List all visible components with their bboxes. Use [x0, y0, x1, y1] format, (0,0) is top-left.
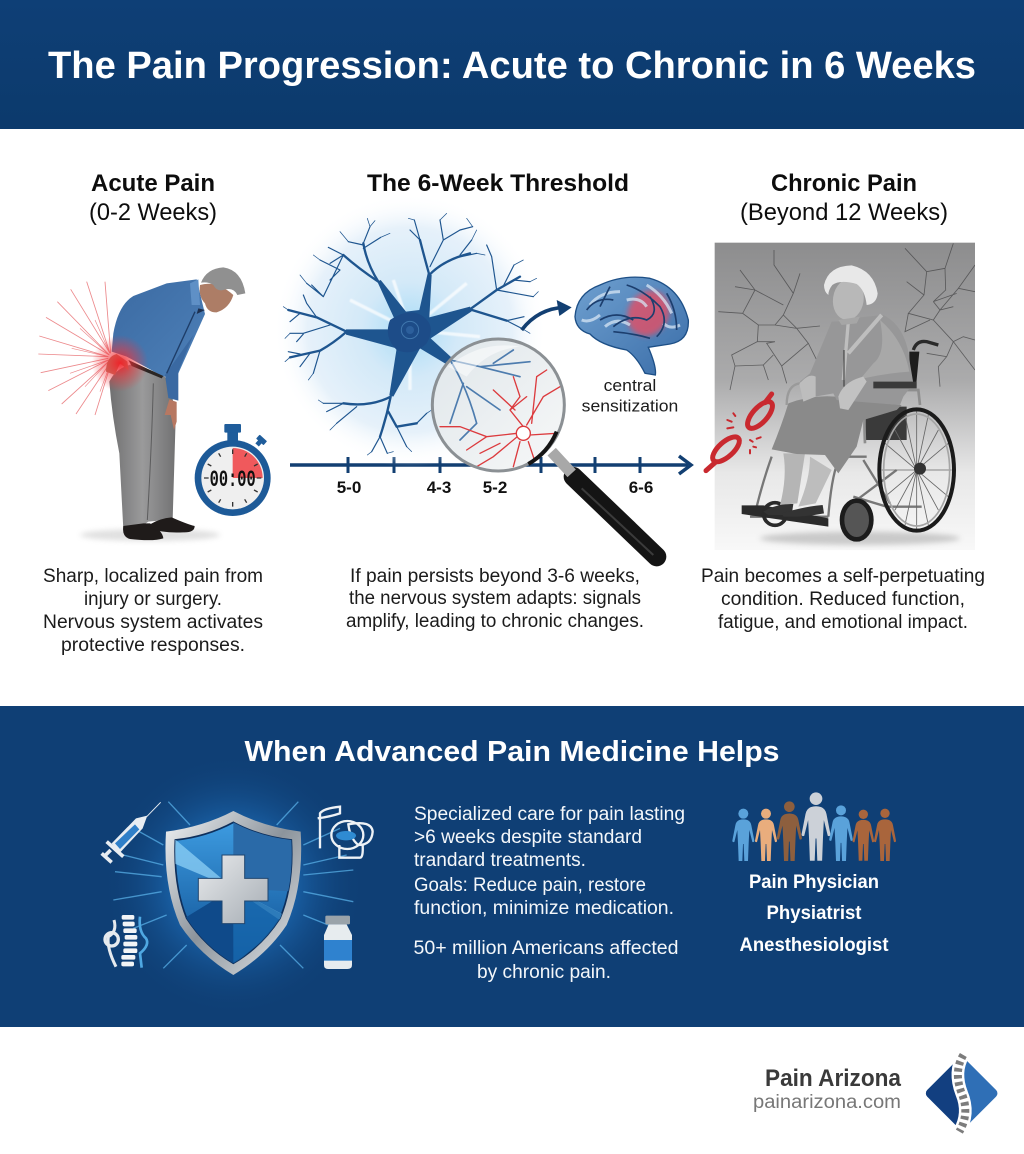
- timeline axis with week labels: [290, 456, 691, 497]
- text block: acute description: protective responses.: [61, 635, 245, 656]
- brand name and url: Pain Arizona: [765, 1065, 902, 1092]
- list: specialist types: Pain Physician: [749, 872, 879, 893]
- label: central sensitization: sensitization: [582, 396, 678, 415]
- icon: spine: [105, 915, 147, 968]
- text block: threshold description: amplify, leading to chronic changes.: [346, 611, 644, 632]
- icon: group of specialists: [732, 792, 896, 861]
- arrow: neuron to brain: [522, 300, 572, 330]
- timeline axis with week labels: 5-0: [337, 478, 361, 497]
- heading: acute pain: [89, 170, 217, 226]
- stat: Americans affected: 50+ million Americans affected: [414, 938, 678, 959]
- text block: acute description: [43, 566, 263, 656]
- list: specialist types: Physiatrist: [766, 903, 862, 924]
- text block: specialized care and goals: >6 weeks despite standard: [414, 827, 642, 848]
- text block: threshold description: If pain persists beyond 3-6 weeks,: [350, 566, 640, 587]
- label: central sensitization: [582, 376, 678, 415]
- text block: chronic description: [701, 566, 985, 633]
- list: specialist types: [740, 872, 889, 956]
- text block: chronic description: Pain becomes a self-perpetuating: [701, 566, 985, 587]
- heading: acute pain: Acute Pain: [91, 170, 215, 197]
- brand name and url: painarizona.com: [753, 1092, 901, 1113]
- icon: stopwatch: [195, 424, 271, 516]
- logo: diamond with spine: [924, 1055, 999, 1132]
- text block: specialized care and goals: trandard treatments.: [414, 850, 586, 871]
- text block: specialized care and goals: Specialized care for pain lasting: [414, 804, 685, 825]
- text block: specialized care and goals: Goals: Reduce pain, restore: [414, 875, 646, 896]
- text block: acute description: Nervous system activates: [43, 612, 263, 633]
- text block: chronic description: condition. Reduced function,: [721, 589, 965, 610]
- brand name and url: [753, 1065, 902, 1113]
- title: The Pain Progression: Acute to Chronic in 6 Weeks: [48, 45, 976, 87]
- text block: chronic description: fatigue, and emotional impact.: [718, 612, 968, 633]
- panel: when advanced pain medicine helps: [0, 706, 1024, 1027]
- timeline axis with week labels: 6-6: [629, 478, 653, 497]
- stat: Americans affected: [414, 938, 678, 983]
- list: specialist types: Anesthesiologist: [740, 935, 889, 956]
- illustration: elderly woman in wheelchair on cracked background: [706, 243, 975, 550]
- section heading: When Advanced Pain Medicine Helps: [244, 736, 780, 768]
- icon: medication vial: [324, 916, 352, 969]
- icon: stopwatch: 00:00: [210, 467, 256, 493]
- panel: the 6-week threshold: [273, 170, 691, 632]
- text block: threshold description: the nervous system adapts: signals: [349, 588, 641, 609]
- heading: chronic pain: (Beyond 12 Weeks): [740, 199, 948, 226]
- footer brand: [753, 1055, 999, 1132]
- figure: [780, 453, 805, 505]
- icon: syringe: [102, 802, 161, 862]
- label: central sensitization: central: [604, 376, 656, 395]
- text block: acute description: injury or surgery.: [84, 589, 222, 610]
- icon: magnifying glass: [432, 338, 657, 557]
- illustration: man bending over holding his lower back: [38, 267, 271, 541]
- panel: chronic pain: [701, 170, 985, 633]
- text block: threshold description: [346, 566, 644, 632]
- text block: specialized care and goals: function, minimize medication.: [414, 898, 674, 919]
- text block: acute description: Sharp, localized pain from: [43, 566, 263, 587]
- panel: acute pain: [38, 170, 271, 656]
- illustration: glowing neuron: [273, 193, 547, 467]
- icon: medical device: [318, 807, 373, 858]
- wheelchair: [742, 341, 954, 539]
- heading: chronic pain: [740, 170, 948, 226]
- timeline axis with week labels: 5-2: [483, 478, 507, 497]
- icon: brain with red sensitized region: [575, 277, 688, 375]
- header banner: [0, 0, 1024, 129]
- timeline axis with week labels: 4-3: [427, 478, 451, 497]
- broken red chain: [706, 394, 777, 471]
- heading: threshold: The 6-Week Threshold: [367, 170, 629, 197]
- heading: chronic pain: Chronic Pain: [771, 170, 917, 197]
- heading: acute pain: (0-2 Weeks): [89, 199, 217, 226]
- icon: shield with medical cross: [113, 758, 354, 986]
- text block: specialized care and goals: [414, 804, 685, 919]
- stat: Americans affected: by chronic pain.: [477, 962, 611, 983]
